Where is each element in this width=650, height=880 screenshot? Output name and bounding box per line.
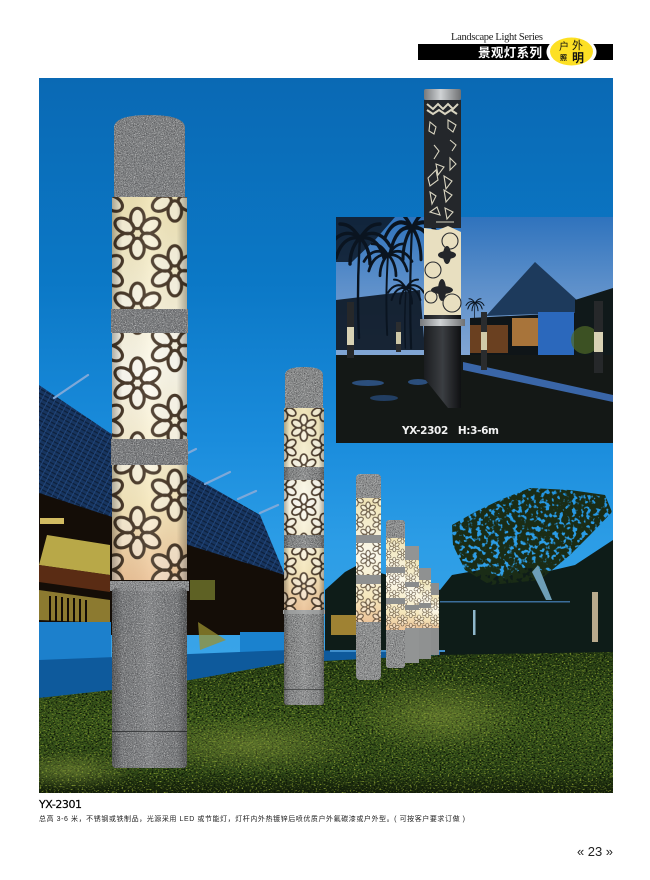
water and blue wall [39, 622, 440, 700]
building roof [39, 385, 285, 575]
lamp far 1 [386, 520, 405, 668]
main photo panel: YX-2301 lamps at dusk [0, 78, 613, 793]
roof beams [54, 375, 278, 513]
lamp far 2 [405, 546, 419, 663]
lamp steel ring [420, 319, 465, 326]
lamp one base [110, 581, 189, 768]
header Chinese title: 景观灯系列 [478, 45, 542, 60]
page number: « 23 » [577, 844, 613, 859]
lamp far 3 [419, 568, 431, 659]
sky [39, 78, 613, 658]
inset label: YX-2302 H:3-6m [401, 425, 499, 437]
lamp three [356, 474, 381, 680]
header: series title banner [418, 32, 613, 68]
lamp cream floral section [424, 226, 461, 315]
inset ground and path [336, 355, 613, 443]
lamp top steel cap [424, 89, 461, 100]
building under-roof and interior [39, 490, 285, 650]
lamp one band lower [111, 439, 188, 465]
inset distant lamps [347, 301, 603, 373]
lamp one top cap [114, 115, 185, 197]
lamp one: large foreground lamp [110, 115, 189, 768]
caption model name: YX-2301 [38, 798, 82, 811]
far lamps in the row [386, 520, 439, 668]
header yellow badge: 照 [560, 53, 567, 63]
lawn [0, 650, 613, 793]
inset house [470, 262, 613, 355]
header English series name: Landscape Light Series [451, 32, 543, 43]
lamp YX-2302 [420, 89, 465, 408]
inset photo panel: YX-2302 [330, 211, 613, 443]
lamp one lit body [112, 197, 187, 580]
lamp far 4 [431, 583, 439, 655]
trees behind right lawn [325, 488, 613, 655]
inset palm trees [330, 211, 484, 350]
lamp two [283, 367, 325, 705]
header yellow badge: 户 [559, 38, 569, 53]
lamp black base [424, 315, 461, 408]
header yellow badge: 明 [572, 49, 584, 66]
header yellow badge: 外 [572, 37, 583, 53]
header yellow badge [546, 36, 596, 68]
inset sky [336, 217, 613, 355]
lamp black butterfly section [424, 100, 461, 228]
caption description: 总高 3-6 米，不锈钢或铁制品，光源采用 LED 或节能灯，灯杆内外热镀锌后喷优质户外氟碳漆或户外型。( 可按客户要求订做 ) [39, 814, 465, 823]
lamp one band upper [111, 309, 188, 333]
header black bar [418, 44, 613, 60]
